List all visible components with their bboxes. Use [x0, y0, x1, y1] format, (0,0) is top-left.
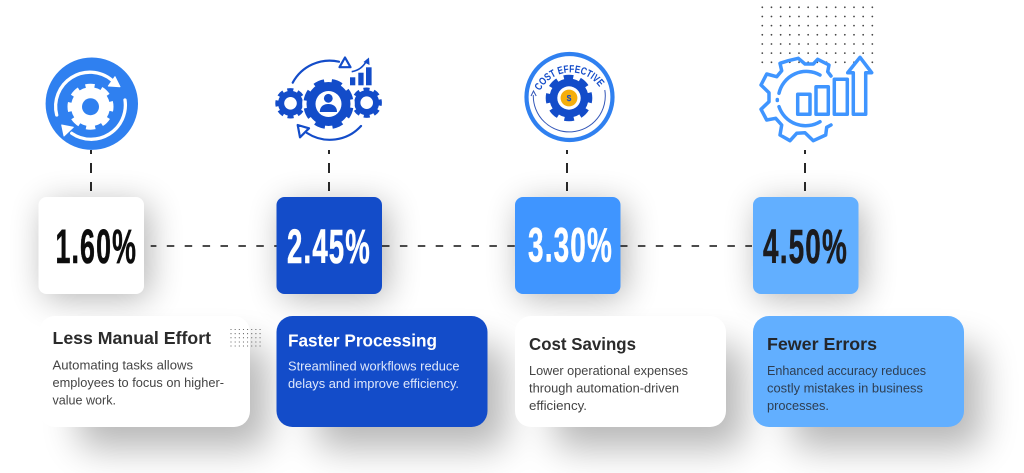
card: Fewer Errors	[753, 316, 964, 427]
icon: gear with rising bars and arrow	[761, 57, 872, 141]
connectors: vertical dashed lines	[91, 150, 805, 191]
description: employees to focus on higher-	[52, 376, 224, 390]
icon: gears with person and growth chart	[277, 58, 380, 140]
heading: Less Manual Effort	[52, 328, 211, 348]
stat value: 2.45%	[287, 221, 371, 274]
panel: stat 3.30%	[515, 197, 620, 294]
description	[288, 360, 460, 391]
description: through automation-driven	[529, 382, 679, 396]
description	[52, 358, 224, 408]
icon: cost effective badge: $	[567, 93, 572, 103]
card: Less Manual Effort	[39, 316, 262, 427]
card: Faster Processing	[276, 316, 488, 427]
card: Cost Savings	[515, 316, 726, 427]
panel: stat 4.50%	[753, 197, 858, 294]
description: delays and improve efficiency.	[288, 377, 459, 391]
panel: stat 1.60%	[38, 197, 144, 294]
description: costly mistakes in business	[767, 382, 923, 396]
heading: Fewer Errors	[767, 334, 877, 354]
panel shadows: stat boxes	[44, 204, 863, 298]
icon: automation gear in circle	[46, 57, 138, 150]
stat value: 3.30%	[528, 220, 613, 272]
icon: cost effective badge	[524, 52, 615, 142]
icon: cost effective badge: COST EFFECTIVE	[535, 65, 605, 90]
decorative dots	[231, 330, 262, 346]
description	[529, 364, 688, 413]
card shadows	[78, 345, 982, 449]
heading: Faster Processing	[288, 330, 437, 350]
stat value: 4.50%	[763, 221, 848, 274]
description: Streamlined workflows reduce	[288, 360, 460, 374]
description: Lower operational expenses	[529, 364, 688, 378]
connector: horizontal dashed timeline	[151, 245, 752, 247]
description	[767, 364, 926, 413]
description: Automating tasks allows	[52, 358, 193, 372]
description: value work.	[52, 394, 116, 408]
stat value: 1.60%	[56, 221, 137, 274]
description: Enhanced accuracy reduces	[767, 364, 926, 378]
description: efficiency.	[529, 399, 587, 413]
panel: stat 2.45%	[276, 197, 382, 294]
background dot grid	[762, 7, 875, 62]
description: processes.	[767, 399, 829, 413]
heading: Cost Savings	[529, 334, 636, 354]
